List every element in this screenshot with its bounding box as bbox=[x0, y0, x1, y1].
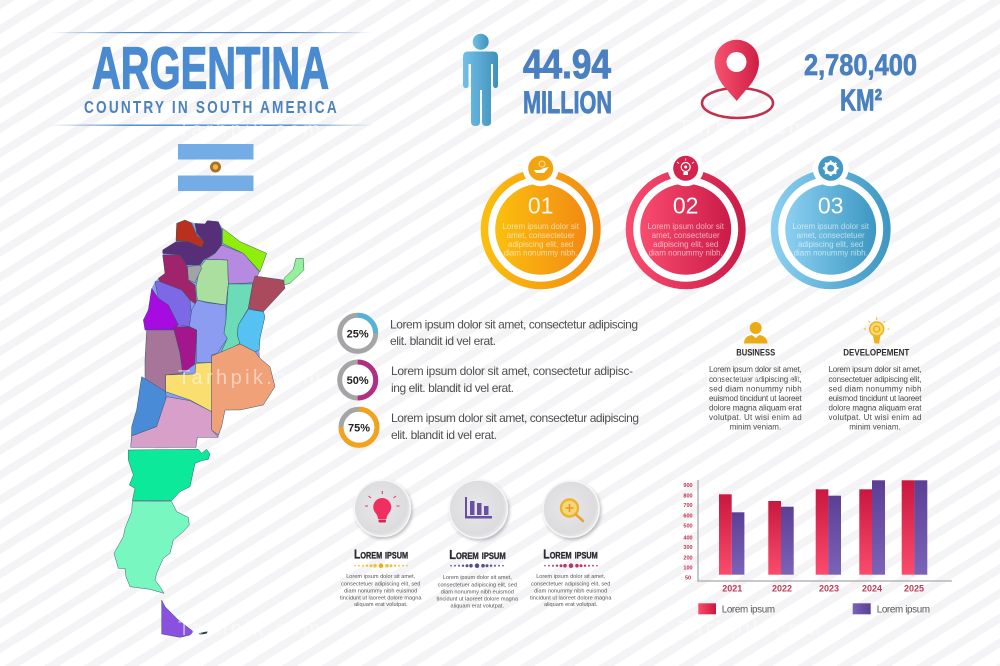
stat: area: 2,780,400 bbox=[804, 49, 917, 82]
y axis labels: 400 bbox=[683, 535, 693, 541]
watermarks: Tarhpik.com bbox=[178, 119, 320, 141]
dots bbox=[544, 563, 598, 568]
body text: amet, consectetuer bbox=[797, 231, 865, 240]
x axis years: 2023 bbox=[819, 584, 839, 594]
body text: diam nonummy nibh euismod bbox=[344, 589, 417, 595]
body text bbox=[647, 222, 725, 258]
stat: area: KM² bbox=[840, 82, 882, 118]
body text: consectetuer adipiscing elit, sed bbox=[438, 582, 517, 588]
watermarks: Tarhpik.com bbox=[678, 117, 820, 139]
text: development description: dolore magna aliquam erat bbox=[828, 403, 922, 412]
text: business description: volutpat. Ut wisi enim ad bbox=[709, 413, 802, 422]
body text bbox=[792, 222, 870, 258]
number 03: 03 bbox=[818, 192, 843, 218]
y axis labels: 50 bbox=[685, 576, 691, 582]
icon: idea bulb bbox=[673, 156, 698, 181]
number 02: 02 bbox=[673, 192, 698, 218]
subheading: COUNTRY IN SOUTH AMERICA bbox=[84, 99, 337, 117]
text: business description: dolore magna aliquam erat bbox=[709, 403, 802, 412]
donut: 25%: 25% bbox=[347, 328, 369, 340]
donut: 50% bbox=[340, 362, 376, 398]
panel: circle 03 bbox=[771, 150, 891, 289]
text: 25% description: Lorem ipsum dolor sit amet, consectetur adipiscing bbox=[390, 318, 638, 332]
x axis years: 2022 bbox=[772, 584, 792, 594]
text: 75% description: Lorem ipsum dolor sit amet, consectetur adipiscing bbox=[391, 411, 639, 425]
icon: bars bbox=[465, 497, 492, 518]
icon: red bulb bbox=[365, 491, 400, 522]
body text: diam nonummy nibh. bbox=[794, 248, 868, 258]
y axis labels: 100 bbox=[683, 566, 693, 572]
legend bbox=[698, 603, 930, 616]
y axis labels: 600 bbox=[683, 514, 693, 520]
map of Argentina bbox=[114, 220, 304, 637]
body text: amet, consectetuer bbox=[652, 231, 720, 240]
legend: Lorem ipsum bbox=[877, 605, 930, 616]
body text bbox=[530, 574, 612, 608]
heading: Lorem ipsum bbox=[354, 546, 408, 561]
heading: business: BUSINESS bbox=[736, 348, 775, 358]
stat: population: MILLION bbox=[523, 84, 612, 120]
southern provinces bbox=[114, 449, 210, 637]
body text: diam nonummy nibh. bbox=[649, 248, 723, 258]
donut: 25% bbox=[340, 315, 376, 351]
x axis years: 2025 bbox=[904, 584, 924, 594]
icon: gear bbox=[818, 156, 843, 181]
northern provinces bbox=[131, 220, 304, 447]
text: 25% description bbox=[390, 318, 638, 348]
panel: circle 01 bbox=[481, 150, 601, 289]
body text: Lorem ipsum dolor sit bbox=[647, 222, 725, 231]
dots bbox=[450, 563, 504, 568]
icon: magnifier bbox=[561, 500, 583, 521]
text: business description: sed diam nonummy nibh bbox=[709, 384, 802, 393]
x axis years: 2024 bbox=[862, 584, 882, 594]
body text: Lorem ipsum dolor sit amet, bbox=[443, 575, 512, 581]
panel: chart card bbox=[437, 480, 519, 610]
body text: diam nonummy nibh euismod bbox=[441, 590, 514, 596]
body text: adipiscing elit, sed bbox=[653, 240, 718, 249]
text: 75% description: elit. blandit id vel erat. bbox=[391, 428, 497, 442]
body text: diam nonummy nibh euismod bbox=[534, 589, 607, 595]
icon: development bulb bbox=[864, 317, 890, 344]
body text: adipiscing elit, sed bbox=[798, 240, 863, 249]
watermarks bbox=[178, 117, 820, 640]
stat: population bbox=[523, 41, 612, 120]
y axis labels: 800 bbox=[683, 493, 693, 499]
icon: businessman bbox=[744, 322, 768, 344]
x axis years: 2021 bbox=[722, 584, 742, 594]
legend: Lorem ipsum bbox=[722, 605, 775, 616]
donut: 75%: 75% bbox=[348, 422, 370, 434]
text: development description: volutpat. Ut wisi enim ad bbox=[828, 413, 922, 422]
body text: tincidunt ut laoreet dolore magna bbox=[437, 596, 519, 602]
y axis labels: 900 bbox=[683, 483, 693, 489]
text: 50% description bbox=[391, 364, 633, 395]
icon: flag of Argentina bbox=[178, 144, 254, 191]
text: 75% description bbox=[391, 411, 639, 442]
text: development description: sed diam nonummy nibh bbox=[828, 384, 922, 393]
body text: Lorem ipsum dolor sit bbox=[502, 222, 580, 231]
body text: Lorem ipsum dolor sit bbox=[792, 222, 870, 231]
body text bbox=[502, 222, 580, 258]
icon: hand bbox=[528, 156, 553, 181]
x axis years bbox=[722, 584, 924, 594]
text: 25% description: elit. blandit id vel erat. bbox=[390, 334, 496, 348]
heading: Lorem ipsum bbox=[449, 547, 506, 562]
icon: map pin bbox=[702, 40, 773, 118]
text: business description: minim veniam. bbox=[730, 422, 781, 431]
dots bbox=[354, 563, 408, 568]
panel: search card bbox=[530, 481, 612, 608]
watermarks: Tarhpik.com bbox=[178, 367, 320, 389]
panel: circle 02 bbox=[626, 150, 746, 289]
bars bbox=[719, 480, 927, 575]
body text: aliquam erat volutpat. bbox=[544, 602, 598, 608]
stat: population: 44.94 bbox=[523, 41, 611, 87]
text: business description: euismod tincidunt ut laoreet bbox=[709, 394, 802, 403]
text: 50% description: Lorem ipsum dolor sit amet, consectetur adipisc- bbox=[391, 364, 633, 378]
heading: Argentina: ARGENTINA bbox=[92, 36, 329, 102]
panel: idea card bbox=[340, 480, 422, 608]
text: development description: euismod tincidunt ut laoreet bbox=[828, 394, 922, 403]
text: 50% description: ing elit. blandit id vel erat. bbox=[391, 381, 514, 395]
y axis labels: 500 bbox=[683, 524, 693, 530]
heading: Lorem ipsum bbox=[543, 546, 598, 561]
body text: aliquam erat volutpat. bbox=[451, 604, 504, 610]
number 01: 01 bbox=[528, 192, 553, 218]
donut: 75% bbox=[341, 409, 377, 445]
text: business description: Lorem ipsum dolor sit amet, bbox=[709, 365, 802, 374]
body text bbox=[437, 575, 519, 610]
watermarks: Tarhpik.com bbox=[678, 618, 820, 640]
y axis labels bbox=[683, 483, 693, 582]
body text: diam nonummy nibh. bbox=[504, 248, 578, 258]
body text: adipiscing elit, sed bbox=[508, 240, 573, 249]
y axis labels: 300 bbox=[683, 545, 693, 551]
text: business description: consectetuer adipiscing elit, bbox=[709, 375, 802, 384]
body text: aliquam erat volutpat. bbox=[354, 602, 408, 608]
icon: person bbox=[463, 34, 498, 126]
watermarks: Tarhpik.com bbox=[678, 367, 820, 389]
watermarks: Tarhpik.com bbox=[178, 618, 320, 640]
body text bbox=[340, 574, 422, 608]
body text: amet, consectetuer bbox=[507, 231, 575, 240]
bar chart bbox=[683, 480, 952, 616]
text: business description bbox=[709, 365, 802, 431]
stat: area bbox=[804, 49, 917, 118]
body text: tincidunt ut laoreet dolore magna bbox=[530, 595, 612, 601]
body text: consectetuer adipiscing elit, sed bbox=[341, 581, 420, 587]
body text: Lorem ipsum dolor sit amet, bbox=[346, 574, 416, 580]
text: development description: minim veniam. bbox=[849, 422, 901, 431]
text: development description: consectetuer adipiscing elit, bbox=[828, 375, 922, 384]
title block bbox=[48, 32, 374, 126]
heading: development: DEVELOPEMENT bbox=[843, 348, 910, 358]
text: development description: Lorem ipsum dolor sit amet, bbox=[828, 365, 922, 374]
text: development description bbox=[828, 365, 922, 431]
y axis labels: 700 bbox=[683, 503, 693, 509]
body text: consectetuer adipiscing elit, sed bbox=[531, 581, 610, 587]
y axis labels: 200 bbox=[683, 556, 693, 562]
donut: 50%: 50% bbox=[347, 375, 369, 387]
body text: tincidunt ut laoreet dolore magna bbox=[340, 595, 422, 601]
body text: Lorem ipsum dolor sit amet, bbox=[536, 574, 606, 580]
